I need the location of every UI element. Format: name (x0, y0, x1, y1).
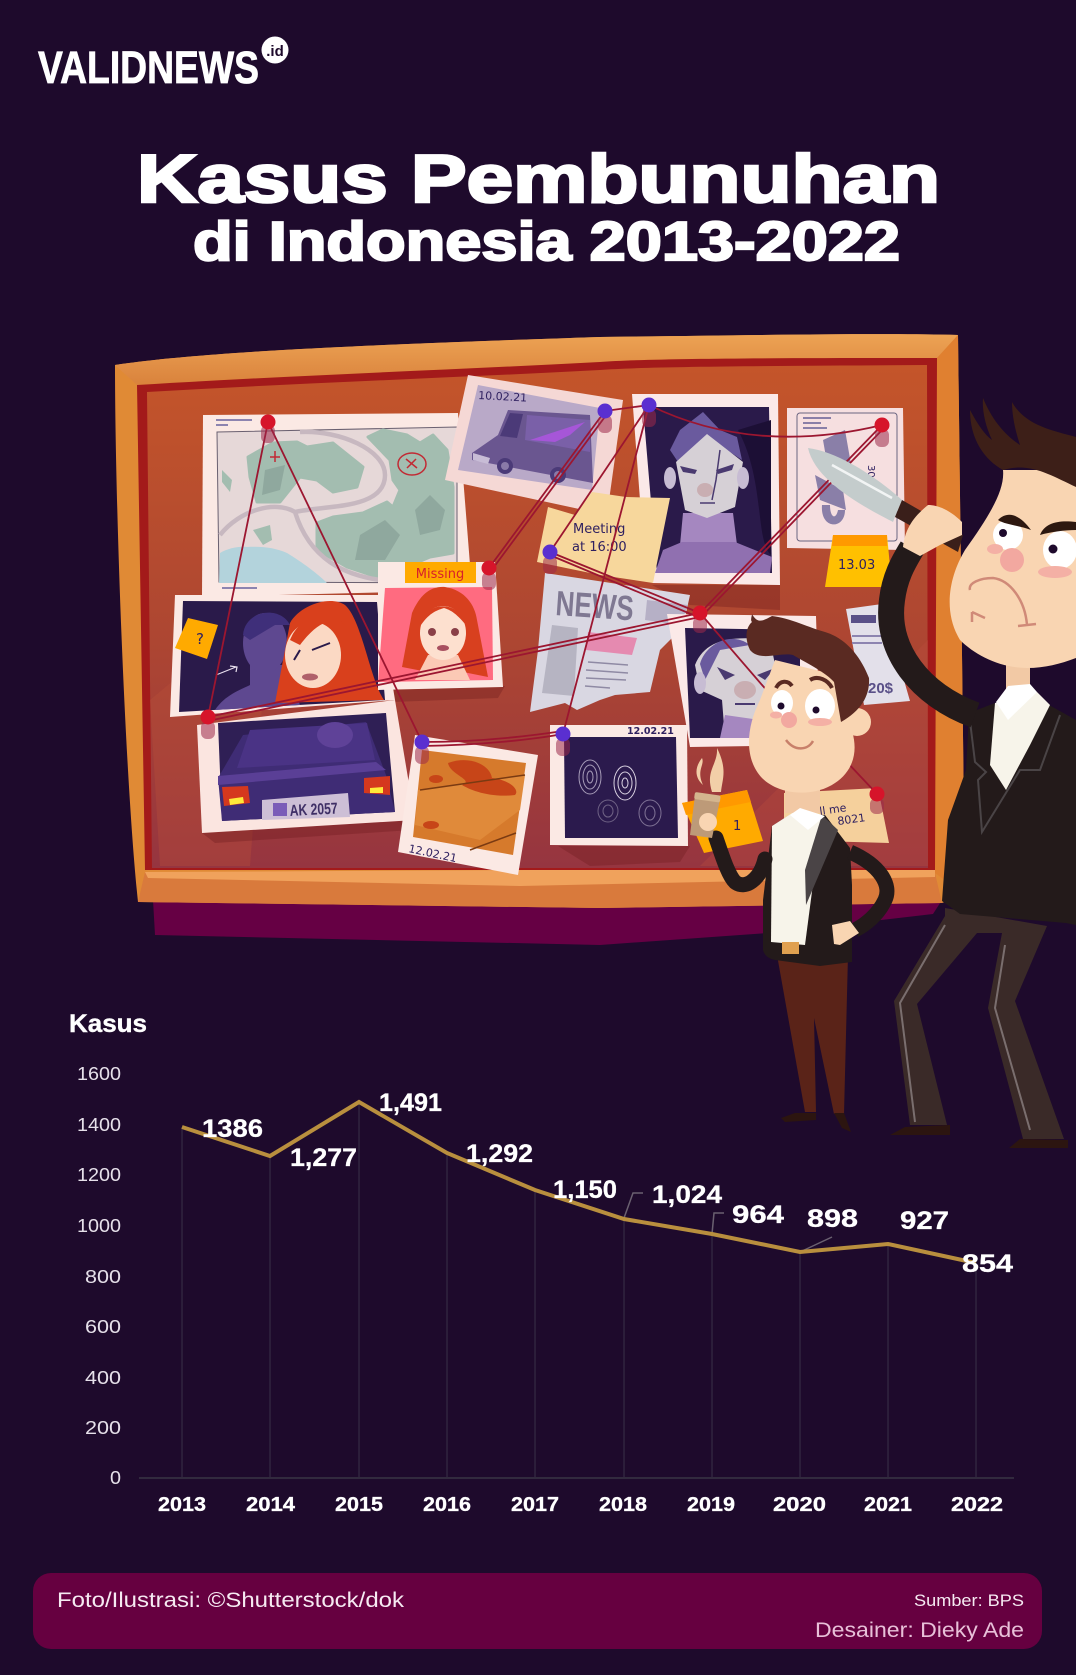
jacket (942, 700, 1076, 925)
jacket (763, 813, 852, 966)
y-axis labels: 400 (85, 1368, 121, 1388)
data labels: 1,150 (553, 1176, 617, 1204)
sticky note: 1: 1 (733, 819, 741, 834)
data labels: 1,491 (379, 1089, 442, 1117)
right arm on hip (850, 852, 887, 930)
y-axis labels: 1200 (77, 1165, 121, 1185)
arm holding cup (716, 838, 765, 885)
character: detective with knife (808, 398, 1076, 1148)
photo: map (202, 413, 472, 597)
note: meeting (537, 492, 670, 583)
photo: couple (170, 595, 395, 717)
data labels: 927 (900, 1207, 949, 1235)
board frame (115, 334, 965, 908)
photo: suspect portrait (632, 394, 780, 585)
knife (808, 448, 963, 552)
x-axis years: 2019 (687, 1494, 735, 1516)
x-axis years: 2021 (864, 1494, 912, 1516)
data labels: 1386 (202, 1115, 263, 1143)
y-axis labels (77, 1064, 121, 1488)
y-axis labels: 200 (85, 1418, 121, 1438)
title: di Indonesia 2013-2022 (193, 210, 900, 272)
x-axis years: 2017 (511, 1494, 559, 1516)
paper: shoe print (787, 408, 905, 550)
x-axis years (158, 1494, 1003, 1516)
photo: car: AK 2057 (289, 801, 338, 820)
photo: missing woman (378, 562, 503, 690)
photo: suspect close-up (667, 614, 820, 747)
cup (690, 748, 724, 838)
x-axis years: 2020 (773, 1494, 826, 1516)
trousers (894, 908, 1064, 1139)
chart: kasus pembunuhan line chart (69, 1010, 1014, 1516)
photo: fingerprints: 12.02.21 (627, 726, 674, 737)
logo: VALIDNEWS.id: VALIDNEWS (38, 42, 259, 93)
photo: van: 10.02.21 (478, 389, 527, 405)
data labels: 964 (732, 1201, 784, 1229)
hair (746, 614, 869, 722)
sticky note: 13.03 (825, 535, 892, 587)
x-axis years: 2013 (158, 1494, 206, 1516)
note: meeting: at 16:00 (572, 540, 627, 555)
photo: blood stain (398, 735, 538, 875)
y-axis labels: 0 (110, 1468, 121, 1488)
title (137, 141, 940, 272)
note: call me: ll me (819, 801, 847, 818)
character: detective with coffee (690, 614, 887, 1132)
data labels: 1,277 (290, 1144, 357, 1172)
x-axis years: 2016 (423, 1494, 471, 1516)
y-axis labels: 1400 (77, 1115, 121, 1135)
paper: receipt 20$ (846, 604, 910, 705)
photo: van (445, 375, 623, 515)
data line (182, 1102, 976, 1263)
shirt (771, 810, 822, 945)
raised arm (891, 548, 975, 715)
photo: fingerprints (550, 725, 688, 846)
x-axis years: 2014 (246, 1494, 296, 1516)
note: meeting: Meeting (573, 522, 625, 537)
data labels: 1,292 (466, 1140, 533, 1168)
trousers (777, 955, 848, 1114)
neck (1006, 660, 1030, 692)
logo: VALIDNEWS.id: .id (266, 43, 284, 60)
sticky note: question mark (175, 618, 218, 659)
y-axis labels: 800 (85, 1267, 121, 1287)
red strings (208, 405, 884, 794)
photo: car (197, 700, 415, 833)
note: call me (784, 788, 889, 843)
x-axis years: 2015 (335, 1494, 383, 1516)
y-axis labels: 600 (85, 1317, 121, 1337)
note: call me: 8021 (837, 811, 866, 828)
shirt (990, 692, 1050, 790)
sticky note: 13.03: 13.03 (838, 558, 875, 573)
footer bar: Desainer: Dieky Ade (815, 1619, 1024, 1642)
newspaper (530, 573, 690, 712)
y-axis title: Kasus (69, 1010, 147, 1038)
data labels: 1,024 (652, 1181, 722, 1209)
face details (993, 520, 1023, 550)
data labels: 854 (962, 1250, 1013, 1278)
newspaper: NEWS (554, 584, 635, 628)
footer bar: Foto/Ilustrasi: ©Shutterstock/dok (57, 1589, 405, 1612)
sticky note: question mark: ? (196, 630, 204, 648)
footer bar (33, 1573, 1042, 1649)
title: Kasus Pembunuhan (137, 141, 940, 217)
y-axis labels: 1000 (77, 1216, 121, 1236)
sticky note: 1 (682, 790, 763, 853)
photo: blood stain: 12.02.21 (407, 842, 458, 865)
x-axis years: 2018 (599, 1494, 647, 1516)
hair (970, 398, 1076, 487)
face details (771, 690, 793, 716)
photo: missing woman: Missing (416, 567, 464, 582)
footer bar: Sumber: BPS (914, 1591, 1024, 1610)
leader lines (624, 1193, 832, 1252)
neck (785, 785, 820, 813)
data labels (202, 1089, 1013, 1278)
push pins (200, 398, 890, 814)
head (749, 660, 855, 793)
y-axis labels: 1600 (77, 1064, 121, 1084)
data labels: 898 (807, 1205, 858, 1233)
paper: shoe print: 30 (865, 465, 876, 478)
head (950, 470, 1076, 668)
illustration: evidence board (115, 334, 965, 945)
x-axis years: 2022 (951, 1494, 1003, 1516)
photo shadows (202, 585, 780, 866)
hand (903, 505, 962, 556)
paper: receipt 20$: 20$ (868, 680, 894, 697)
